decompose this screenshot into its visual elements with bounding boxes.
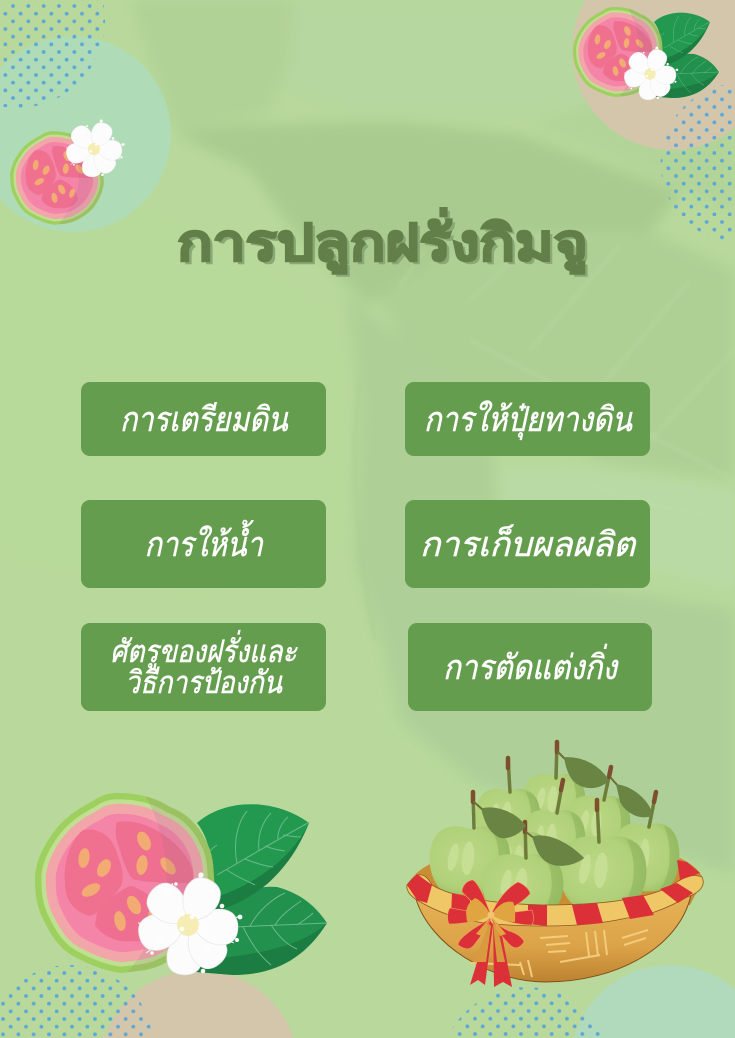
illustration: large guava with leaves and flower bbox=[35, 793, 327, 976]
illustration: top-right guava with leaves and flower bbox=[573, 7, 719, 101]
illustration: red ribbon bow bbox=[448, 880, 534, 987]
basket back rim bbox=[407, 858, 703, 905]
basket front rim with red bands bbox=[407, 875, 703, 926]
halftone dots: top-right bbox=[661, 83, 735, 243]
button: soil fertilizer: การให้ปุ๋ยทางดิน bbox=[423, 401, 632, 439]
button: soil preparation: การเตรียมดิน bbox=[120, 401, 287, 439]
basket bowl bbox=[416, 895, 691, 982]
title: การปลูกฝรั่งกิมจู bbox=[177, 215, 588, 271]
decorative circle: top-right beige bbox=[572, 0, 735, 150]
button: guava pests and prevention: ศัตรูของฝรั่งและ bbox=[110, 634, 297, 669]
guava stems bbox=[473, 742, 656, 858]
button: watering bbox=[81, 500, 326, 588]
halftone dots: bottom-right bbox=[447, 987, 607, 1038]
illustration: top-left guava with flower bbox=[10, 119, 124, 225]
illustration: basket of green guavas bbox=[407, 742, 703, 982]
halftone dots: bottom-left bbox=[0, 965, 154, 1038]
button: guava pests and prevention: วิธีการป้องกัน bbox=[125, 665, 282, 700]
button: pruning bbox=[408, 623, 652, 711]
decorative circle: bottom-right teal bbox=[574, 965, 735, 1038]
button: pruning: การตัดแต่งกิ่ง bbox=[443, 649, 617, 687]
button: harvesting: การเก็บผลผลิต bbox=[420, 526, 635, 564]
button: watering: การให้น้ำ bbox=[144, 526, 263, 564]
guava fruits bbox=[430, 774, 679, 916]
halftone dots: top-left bbox=[0, 0, 105, 108]
button: guava pests and prevention bbox=[81, 623, 326, 711]
guava leaves bbox=[482, 758, 652, 865]
button: soil preparation bbox=[81, 382, 326, 456]
button: harvesting bbox=[405, 500, 650, 588]
decorative circle: bottom beige bbox=[104, 970, 294, 1038]
button: soil fertilizer bbox=[405, 382, 650, 456]
decorative circle: top-left teal bbox=[0, 36, 171, 232]
